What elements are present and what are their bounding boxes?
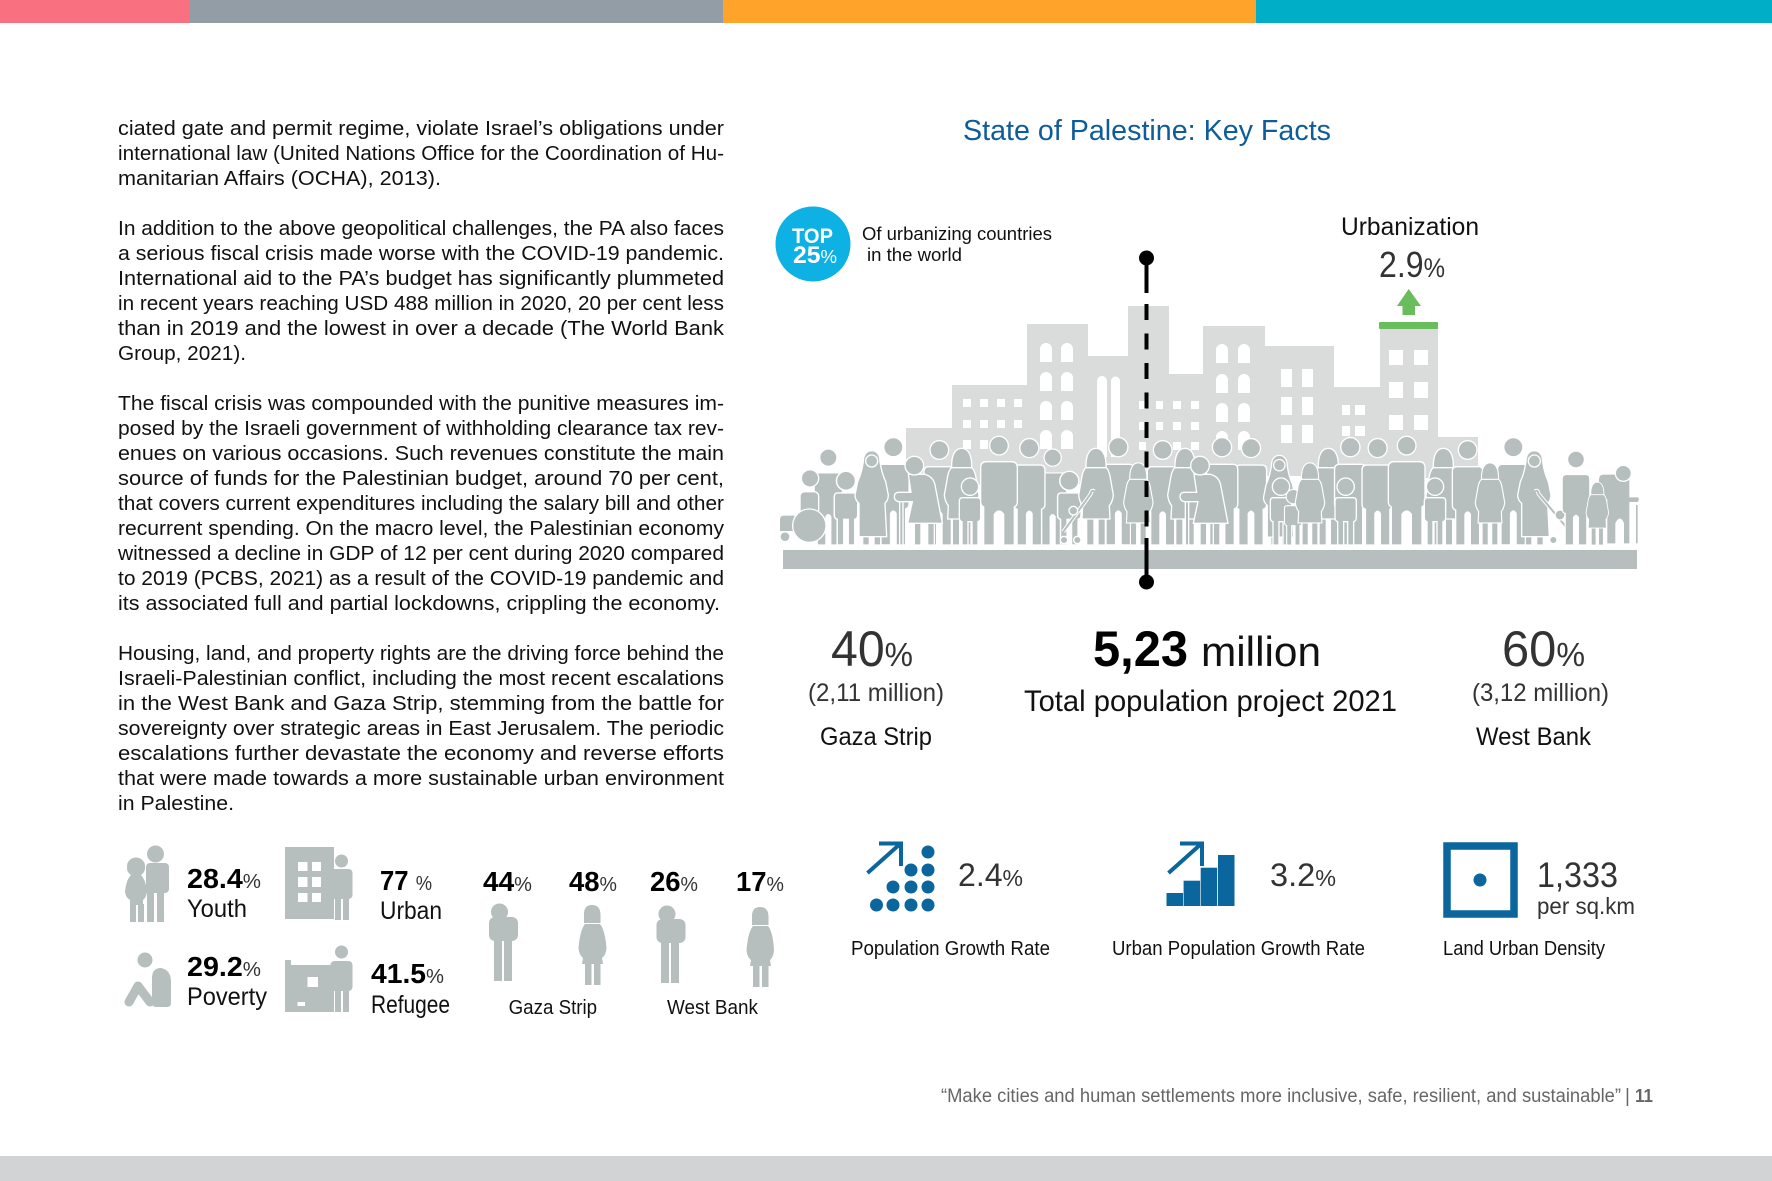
stat: refugee	[285, 946, 450, 1019]
urbanization label and value: Urbanization	[1341, 213, 1479, 241]
body text column: that were made towards a more sustainable urban environment	[118, 768, 724, 790]
stroller right	[1535, 491, 1572, 544]
footer quote and page number: 11	[1635, 1086, 1653, 1106]
stat: land urban density: Land Urban Density	[1443, 938, 1605, 960]
body text column: In addition to the above geopolitical challenges, the PA also faces	[118, 218, 724, 240]
body text column: international law (United Nations Office for the Coordination of Hu-	[118, 143, 724, 165]
body text column: its associated full and partial lockdowns, crippling the economy.	[118, 593, 720, 615]
stat: land urban density: per sq.km	[1537, 893, 1635, 919]
percentages by sex: Gaza Strip: 44%	[483, 866, 532, 897]
stat: Gaza Strip share: (2,11 million)	[808, 679, 944, 707]
percentages by sex: West Bank: 17%	[736, 866, 784, 897]
body text column: Israeli-Palestinian conflict, including the most recent escalations	[118, 668, 724, 690]
percentages by sex: West Bank	[650, 866, 784, 1019]
badge: top 25 percent: TOP	[792, 225, 833, 248]
green roof and up arrow	[1379, 289, 1438, 329]
icon: square with dot	[1447, 846, 1514, 914]
percentages by sex: West Bank: 26%	[650, 866, 698, 897]
body text column: Group, 2021).	[118, 343, 246, 365]
stat: refugee: Refugee	[371, 991, 450, 1019]
percentages by sex: West Bank: West Bank	[667, 997, 759, 1019]
stat: Gaza Strip share	[808, 621, 944, 751]
stat: Gaza Strip share: 40%	[831, 621, 913, 677]
badge caption	[862, 224, 1052, 265]
percentages by sex: Gaza Strip: 48%	[569, 866, 617, 897]
stat: West Bank share: (3,12 million)	[1472, 679, 1609, 707]
body text column: International aid to the PA’s budget has significantly plummeted	[118, 268, 724, 290]
stat: West Bank share	[1472, 621, 1609, 751]
badge caption: Of urbanizing countries	[862, 224, 1052, 244]
stat: poverty: Poverty	[187, 983, 267, 1011]
bottom band	[0, 1156, 1772, 1181]
body text column: to 2019 (PCBS, 2021) as a result of the COVID-19 pandemic and	[118, 568, 724, 590]
body text column: ciated gate and permit regime, violate Israel’s obligations under	[118, 118, 724, 140]
title: State of Palestine: Key Facts	[963, 115, 1331, 147]
stat: land urban density	[1443, 846, 1635, 960]
stat: West Bank share: 60%	[1502, 621, 1585, 677]
body text column: escalations further devastate the economy and reverse efforts	[118, 743, 724, 765]
person in wheelchair	[779, 470, 826, 542]
body text column: recurrent spending. On the macro level, the Palestinian economy	[118, 518, 724, 540]
stat: urban: 77 %	[380, 865, 432, 896]
stat: Gaza Strip share: Gaza Strip	[820, 723, 932, 751]
body text column: in recent years reaching USD 488 million in 2020, 20 per cent less	[118, 293, 724, 315]
stat: poverty	[129, 951, 267, 1011]
body text column: posed by the Israeli government of withholding clearance tax rev-	[118, 418, 724, 440]
crowd of people	[779, 436, 1639, 545]
stat: youth: Youth	[187, 895, 247, 923]
footer quote and page number: “Make cities and human settlements more inclusive, safe, resilient, and sustainable”	[941, 1086, 1621, 1107]
body text column: enues on various occasions. Such revenues constitute the main	[118, 443, 724, 465]
stat: urban population growth rate: Urban Population Growth Rate	[1112, 938, 1365, 960]
stat: land urban density: 1,333	[1537, 856, 1618, 895]
body text column: source of funds for the Palestinian budget, around 70 per cent,	[118, 468, 724, 490]
stat: total population: million	[1201, 628, 1321, 675]
stat: urban population growth rate	[1112, 844, 1365, 960]
city skyline	[906, 306, 1478, 488]
stat: West Bank share: West Bank	[1476, 723, 1591, 751]
stat: population growth rate: Population Growth Rate	[851, 938, 1050, 960]
stat: population growth rate: 2.4%	[958, 857, 1023, 893]
percentages by sex: Gaza Strip	[483, 866, 617, 1019]
urbanization label and value	[1341, 213, 1479, 285]
body text column: manitarian Affairs (OCHA), 2013).	[118, 168, 441, 190]
badge caption: in the world	[867, 245, 962, 265]
body text column: than in 2019 and the lowest in over a decade (The World Bank	[118, 318, 725, 340]
body text column: a serious fiscal crisis made worse with the COVID-19 pandemic.	[118, 243, 724, 265]
stat: total population: Total population project 2021	[1024, 685, 1397, 718]
stroller left	[1060, 491, 1094, 544]
stat: population growth rate	[851, 844, 1050, 960]
icon: dots with arrow	[868, 844, 934, 912]
body text column: witnessed a decline in GDP of 12 per cent during 2020 compared	[117, 543, 724, 565]
stat: urban: Urban	[380, 897, 442, 925]
body text column: in Palestine.	[118, 793, 234, 815]
ground bar	[783, 550, 1637, 569]
top colour band	[0, 0, 1772, 23]
body text column: that covers current expenditures including the salary bill and other	[118, 493, 724, 515]
badge: top 25 percent	[776, 206, 850, 282]
footer quote and page number: |	[1625, 1086, 1630, 1107]
icon: rising bars with arrow	[1166, 844, 1234, 906]
stat: youth: 28.4%	[187, 863, 261, 894]
percentages by sex: Gaza Strip: Gaza Strip	[509, 997, 597, 1019]
stat: urban	[285, 847, 442, 925]
seated person right	[1598, 465, 1639, 544]
stat: youth	[125, 846, 261, 923]
stat: total population: 5,23	[1093, 621, 1188, 677]
body text column: sovereignty over strategic areas in East Jerusalem. The periodic	[118, 718, 724, 740]
body text column	[117, 118, 725, 815]
stat: total population	[1024, 621, 1397, 718]
body text column: in the West Bank and Gaza Strip, stemming from the battle for	[118, 693, 724, 715]
stat: poverty: 29.2%	[187, 951, 261, 982]
body text column: Housing, land, and property rights are the driving force behind the	[118, 643, 724, 665]
stat: refugee: 41.5%	[371, 958, 444, 989]
stat: urban population growth rate: 3.2%	[1270, 857, 1336, 893]
badge: top 25 percent: 25%	[793, 242, 837, 269]
dashed divider line	[1139, 250, 1154, 590]
body text column: The fiscal crisis was compounded with the punitive measures im-	[118, 393, 724, 415]
urbanization label and value: 2.9%	[1379, 244, 1445, 285]
